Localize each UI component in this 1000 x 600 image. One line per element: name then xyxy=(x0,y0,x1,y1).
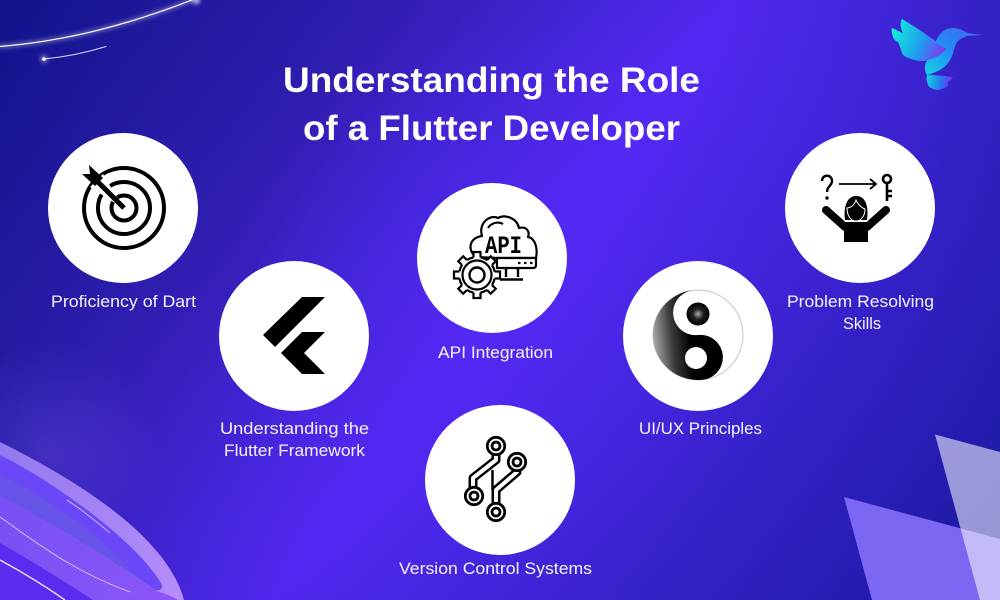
item: Proficiency of Dart xyxy=(48,133,198,311)
icon: person with question and key xyxy=(822,175,892,242)
item: UI/UX Principles xyxy=(623,261,773,438)
icon: git branches xyxy=(465,437,526,521)
item: API Integration xyxy=(417,183,567,362)
title: of a Flutter Developer xyxy=(303,109,680,148)
decorative light streaks top left xyxy=(0,0,200,63)
item: UI/UX Principles: UI/UX Principles xyxy=(639,420,762,438)
decorative ring bottom left xyxy=(0,442,184,600)
icon: yin yang xyxy=(649,288,743,384)
icon: API cloud and gear: API xyxy=(485,232,522,261)
icon: target with arrow xyxy=(82,165,164,248)
item: Understanding the Flutter Framework: Flutter Framework xyxy=(224,442,366,460)
item: Understanding the Flutter Framework xyxy=(219,261,369,460)
title xyxy=(283,61,700,148)
title: Understanding the Role xyxy=(283,61,700,100)
item: Problem Resolving Skills: Skills xyxy=(843,315,881,333)
item: Proficiency of Dart: Proficiency of Dart xyxy=(51,293,196,311)
item: API Integration: API Integration xyxy=(438,344,553,362)
item: Problem Resolving Skills xyxy=(785,133,935,333)
item: Version Control Systems: Version Control Systems xyxy=(399,560,592,578)
icon: API cloud and gear xyxy=(454,216,537,298)
item: Version Control Systems xyxy=(399,405,592,578)
item: Problem Resolving Skills: Problem Resolving xyxy=(787,293,934,311)
icon: Flutter logo xyxy=(263,297,325,374)
logo: hummingbird xyxy=(892,19,982,90)
decorative shapes bottom right xyxy=(844,434,1000,600)
item: Understanding the Flutter Framework: Understanding the xyxy=(220,420,369,438)
